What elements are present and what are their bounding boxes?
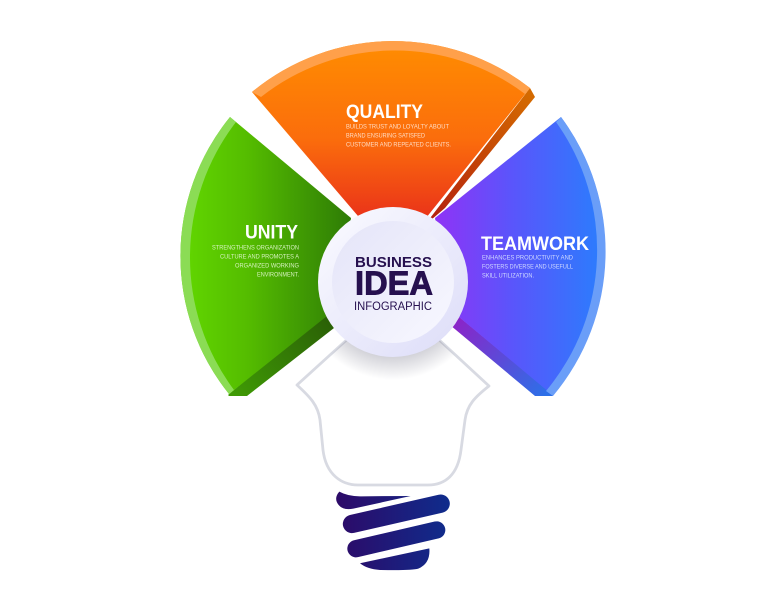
quality text: BUILDS TRUST AND LOYALTY ABOUT	[346, 124, 449, 130]
unity side	[228, 312, 334, 396]
teamwork heading: TEAMWORK	[481, 233, 589, 255]
center badge	[318, 207, 468, 357]
quality heading: QUALITY	[346, 101, 423, 123]
unity text: ORGANIZED WORKING	[235, 262, 299, 270]
bulb outline	[297, 335, 489, 485]
quality rim	[252, 41, 530, 97]
teamwork text: FOSTERS DIVERSE AND USEFULL	[482, 264, 573, 270]
screw bar 1	[352, 504, 441, 524]
panel: quality	[252, 41, 535, 226]
quality text: CUSTOMER AND REPEATED CLIENTS.	[346, 142, 451, 148]
badge title: BUSINESS	[355, 254, 432, 271]
unity text	[212, 244, 300, 278]
screw bottom piece	[360, 548, 429, 570]
teamwork rim	[546, 117, 606, 396]
unity face	[180, 117, 351, 394]
teamwork face	[435, 117, 605, 395]
badge title	[354, 254, 433, 313]
icon: bulb screw base	[336, 492, 441, 570]
panel: teamwork	[435, 117, 606, 396]
circle shadow	[334, 340, 452, 376]
badge title: INFOGRAPHIC	[354, 301, 432, 313]
quality side	[424, 88, 535, 226]
badge inner disc	[332, 221, 454, 343]
teamwork text: ENHANCES PRODUCTIVITY AND	[482, 254, 573, 262]
teamwork text	[482, 254, 573, 280]
badge outer ring	[318, 207, 468, 357]
unity text: STRENGTHENS ORGANIZATION	[212, 244, 299, 252]
screw top piece	[336, 492, 411, 509]
unity heading: UNITY	[245, 222, 298, 244]
unity rim	[180, 117, 236, 394]
screw bar 2	[356, 530, 437, 549]
quality text: BRAND ENSURING SATISFED	[346, 132, 425, 140]
quality text	[346, 124, 451, 148]
teamwork text: SKILL UTILIZATION.	[482, 272, 534, 280]
unity text: ENVIRONMENT.	[257, 272, 299, 278]
unity text: CULTURE AND PROMOTES A	[220, 254, 300, 260]
panel: unity	[180, 117, 351, 396]
quality face	[252, 41, 530, 218]
teamwork side	[450, 316, 553, 396]
badge title: IDEA	[355, 264, 433, 302]
